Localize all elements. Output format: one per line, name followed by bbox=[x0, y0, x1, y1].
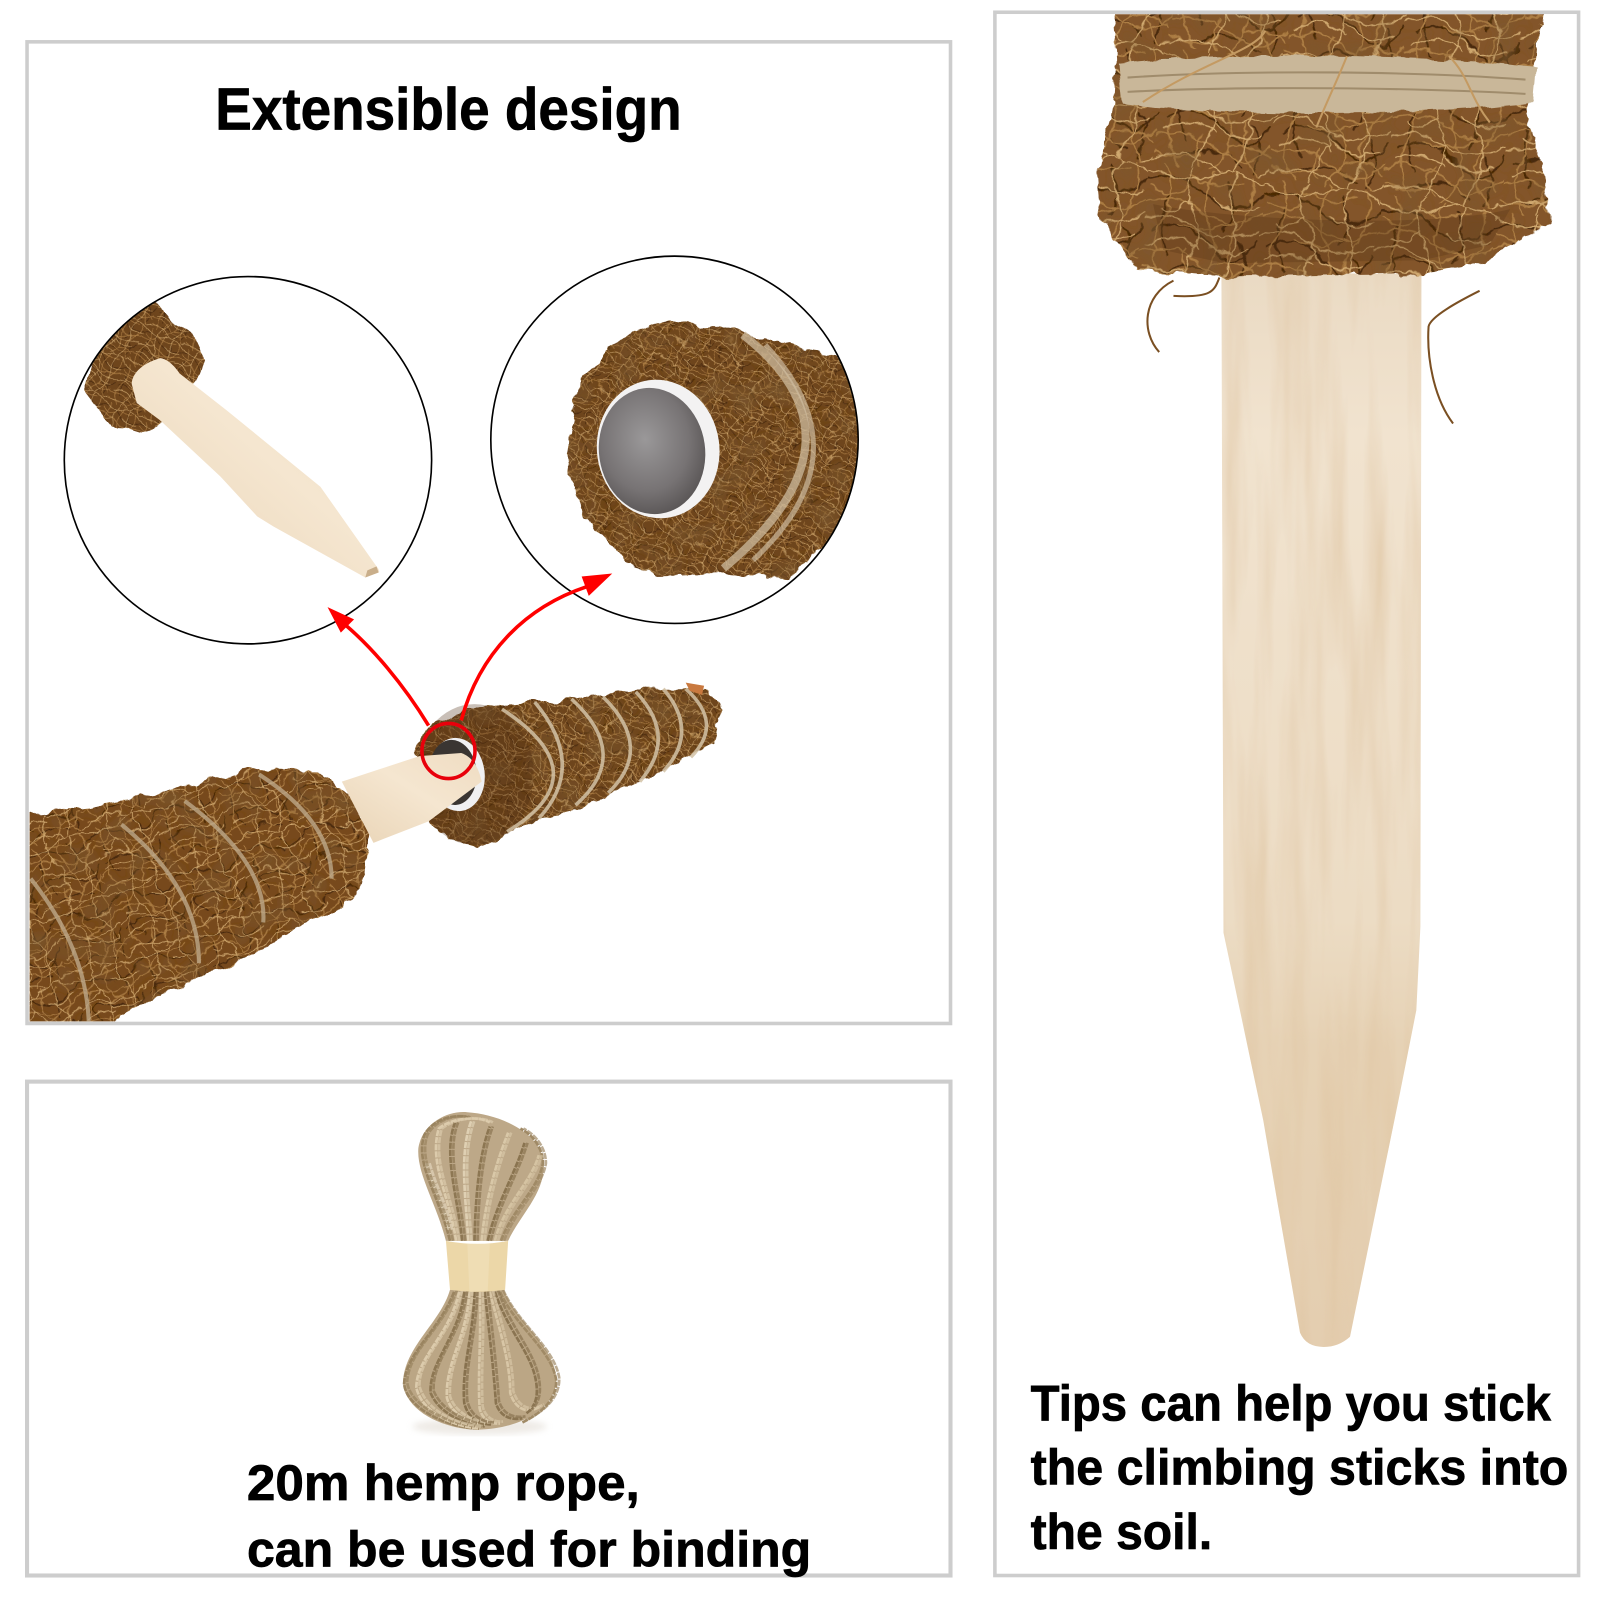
arrow: to tube opening bbox=[461, 573, 612, 720]
upper coir pole bbox=[415, 689, 720, 847]
text: rope caption bbox=[247, 1455, 811, 1577]
title: Extensible design bbox=[215, 76, 682, 143]
white tube end bbox=[440, 738, 485, 812]
wooden connector bbox=[342, 753, 482, 843]
text: rope caption: can be used for binding bbox=[247, 1521, 811, 1577]
photo: coir fibre collar bbox=[1097, 10, 1550, 423]
red highlight circle bbox=[422, 723, 475, 779]
text: rope caption: 20m hemp rope, bbox=[247, 1455, 640, 1511]
text: tip caption: the climbing sticks into bbox=[1031, 1440, 1568, 1496]
arrow: to stick tip bbox=[328, 607, 429, 726]
photo: pointed wooden stick bbox=[1221, 273, 1421, 1347]
product photo: extended stick bbox=[20, 683, 720, 1027]
text: tip caption: the soil. bbox=[1031, 1504, 1212, 1560]
circle: stick tip detail bbox=[64, 277, 432, 644]
panel: extensible design bbox=[20, 42, 951, 1027]
circle: tube opening detail bbox=[491, 256, 878, 623]
lower coir pole bbox=[20, 769, 369, 1027]
text: tip caption: Tips can help you stick bbox=[1031, 1375, 1551, 1431]
panel: hemp rope bbox=[27, 1082, 951, 1577]
orange tag bbox=[686, 683, 704, 695]
paper band bbox=[446, 1241, 508, 1292]
text: tip caption bbox=[1031, 1375, 1568, 1560]
panel: stick tip bbox=[995, 10, 1579, 1576]
icon: hemp rope bundle bbox=[403, 1112, 559, 1435]
